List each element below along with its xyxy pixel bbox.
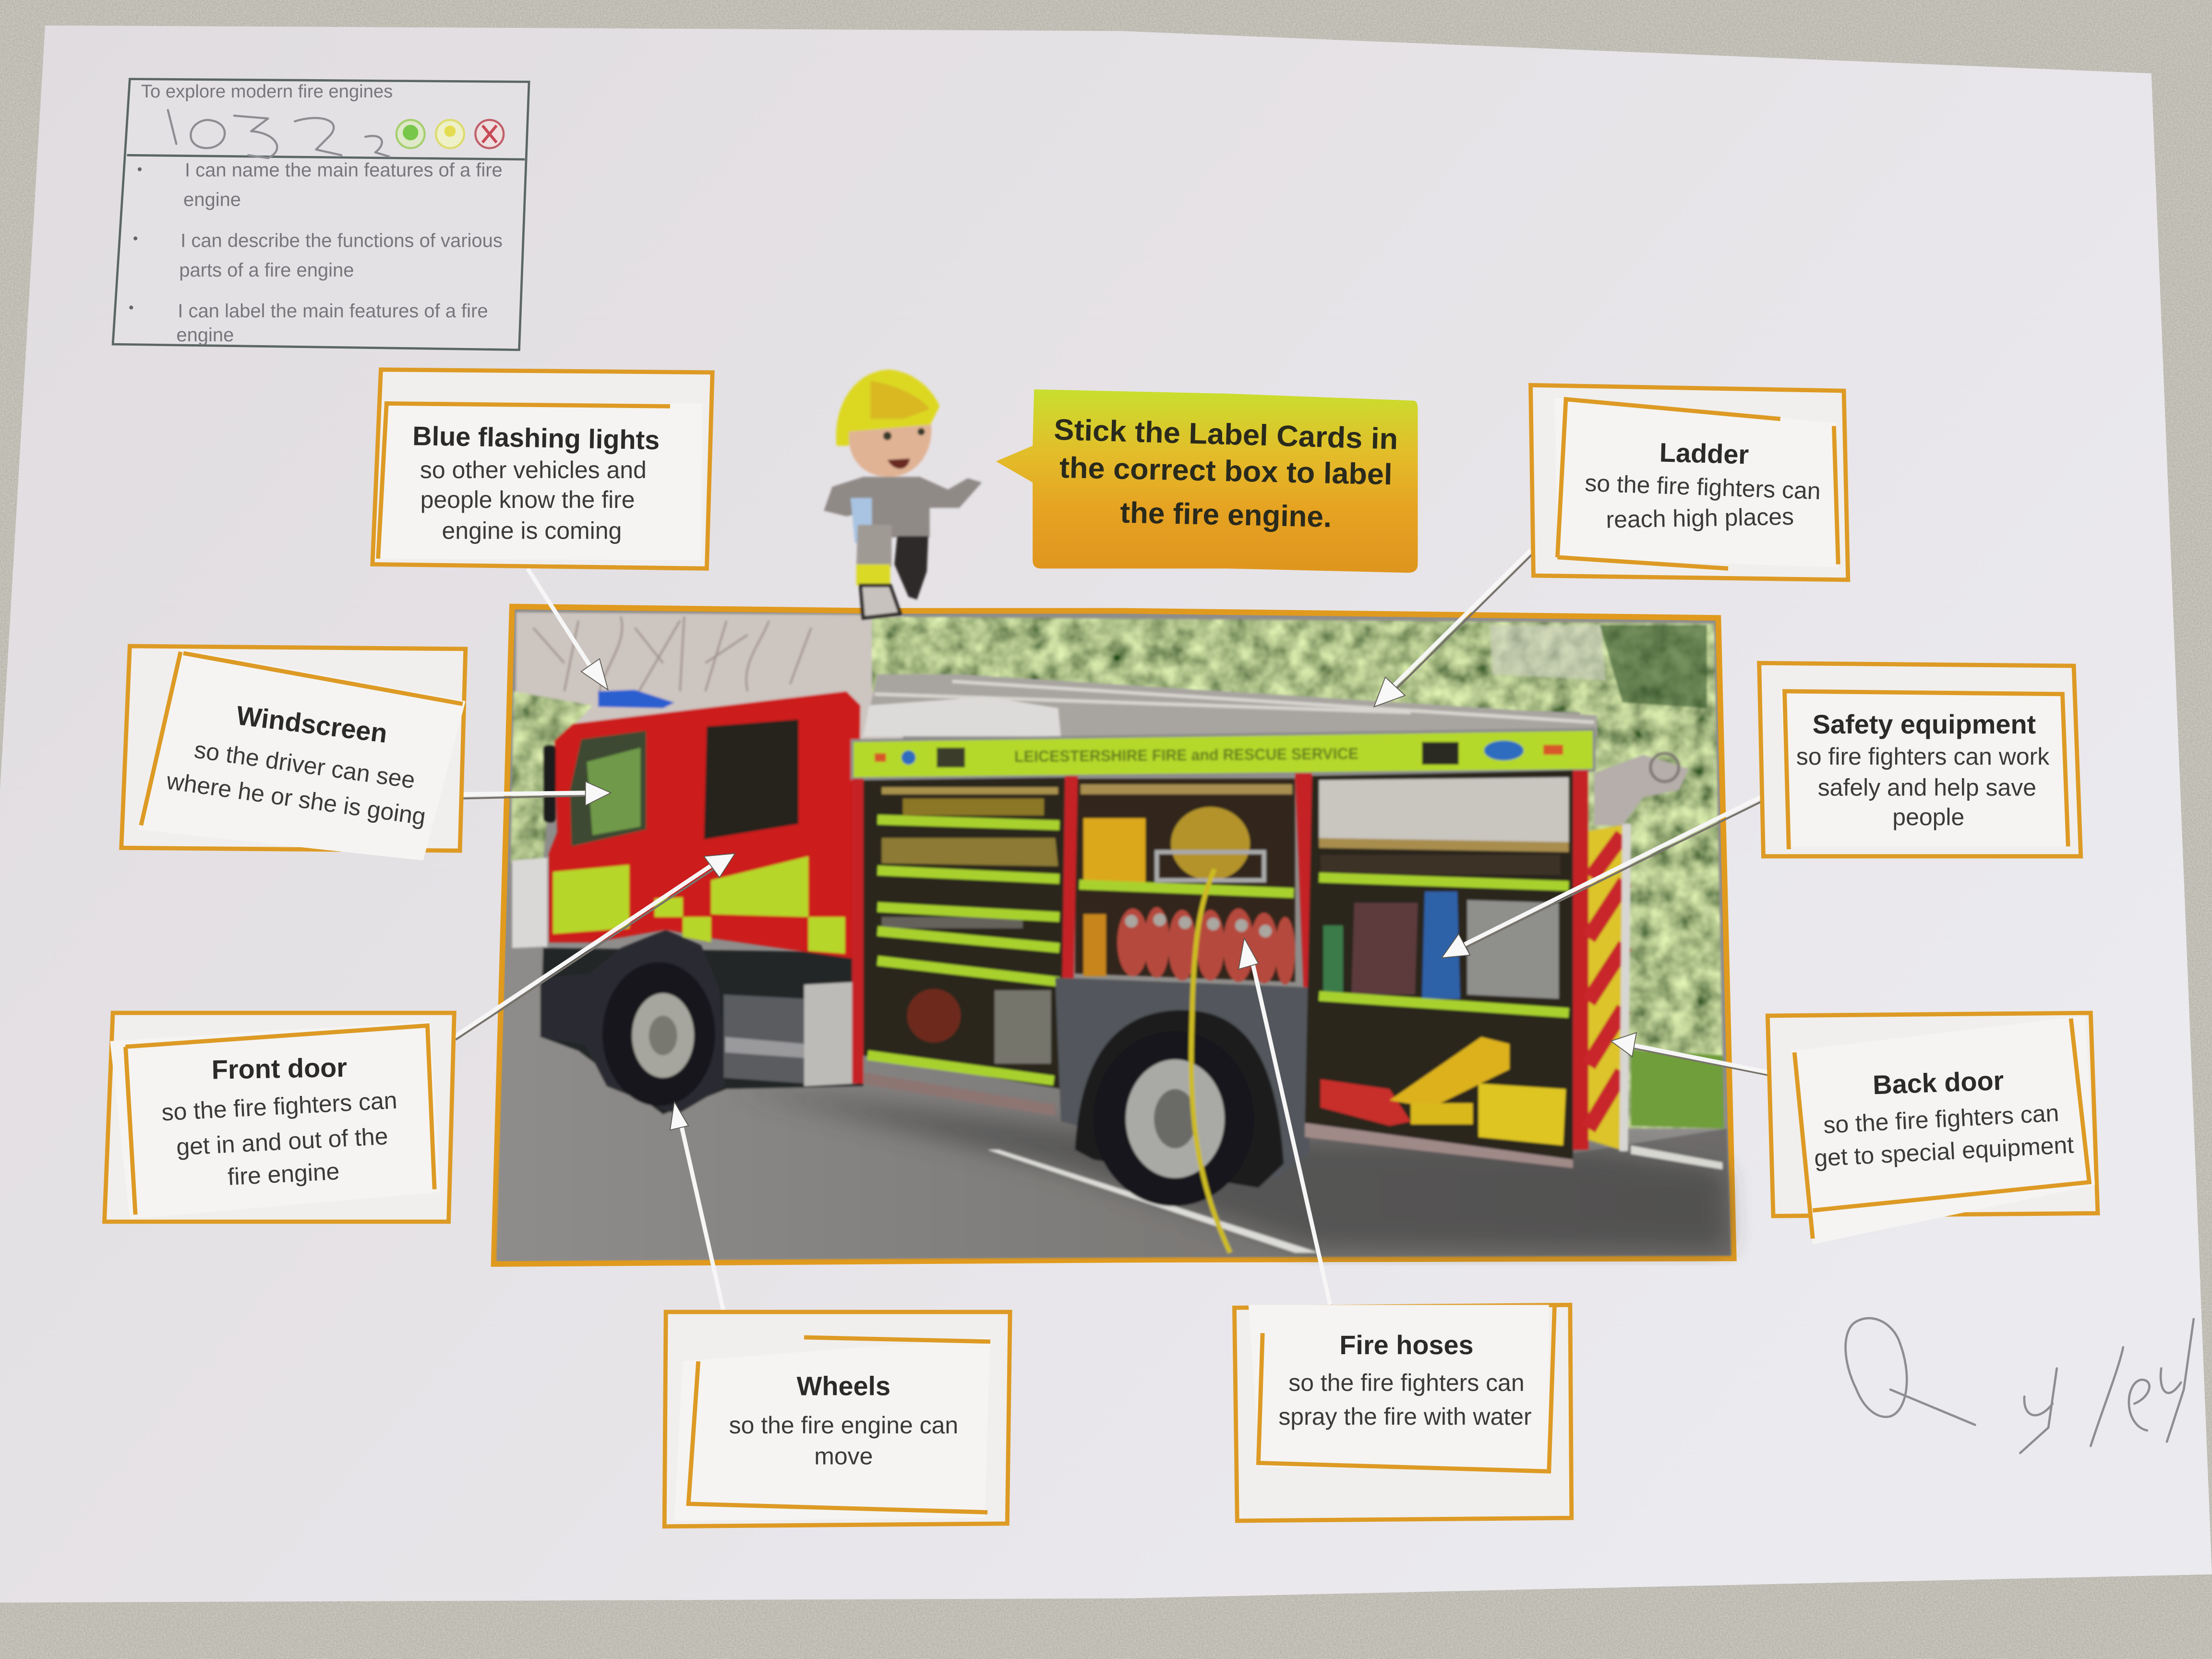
road xyxy=(496,948,1731,1260)
photo of fire engine xyxy=(494,607,1734,1264)
objective bullet list: engine xyxy=(183,189,241,210)
description xyxy=(420,457,647,544)
back leg xyxy=(894,536,928,600)
left locker xyxy=(861,777,1065,1116)
service name on bar: LEICESTERSHIRE FIRE and RESCUE SERVICE xyxy=(1014,745,1358,766)
grass verge xyxy=(1631,1049,1724,1129)
traffic light faces xyxy=(397,120,504,148)
card: fire hoses xyxy=(1234,1305,1572,1521)
description: fire engine xyxy=(227,1158,340,1190)
handwritten name xyxy=(1846,1318,2194,1453)
description xyxy=(729,1412,958,1469)
yellow hose xyxy=(1191,869,1230,1253)
red cab xyxy=(549,691,861,959)
bubble instructions: the fire engine. xyxy=(1120,496,1332,534)
objective bullet list xyxy=(129,159,503,346)
speech bubble xyxy=(996,389,1418,573)
title: Safety equipment xyxy=(1813,709,2036,739)
middle locker xyxy=(1075,779,1295,985)
arrow: wheels xyxy=(670,1102,725,1313)
bubble instructions: Stick the Label Cards in xyxy=(1053,413,1398,456)
description: people know the fire xyxy=(421,486,635,513)
rear body and rear arch xyxy=(1055,978,1312,1188)
card: windscreen xyxy=(121,646,466,861)
objective bullet list: I can describe the functions of various xyxy=(180,230,503,251)
description: so the fire fighters can xyxy=(1288,1370,1525,1396)
card: ladder xyxy=(1531,385,1848,580)
photo frame xyxy=(494,607,1734,1264)
parked white car xyxy=(512,858,547,948)
card: wheels xyxy=(664,1312,1010,1527)
arrow: front door xyxy=(454,854,735,1040)
description: so the fire engine can xyxy=(729,1412,958,1439)
description: reach high places xyxy=(1606,503,1794,533)
right locker xyxy=(1305,770,1573,1168)
arrow: fire hoses xyxy=(1238,938,1332,1306)
road white line xyxy=(987,1150,1319,1253)
bubble instructions: the correct box to label xyxy=(1059,451,1393,491)
objective bullet list: I can label the main features of a fire xyxy=(178,301,488,322)
objective bullet list: parts of a fire engine xyxy=(179,260,354,281)
description: so fire fighters can work xyxy=(1796,743,2050,770)
description: get to special equipment xyxy=(1814,1131,2075,1172)
description: spray the fire with water xyxy=(1278,1403,1532,1430)
description xyxy=(1585,469,1821,533)
arrow: windscreen xyxy=(463,781,611,805)
sky and bare trees xyxy=(515,612,903,790)
front leg xyxy=(856,525,891,567)
front lower body and arch xyxy=(541,930,858,1115)
firefighter character xyxy=(824,370,982,618)
title: Blue flashing lights xyxy=(412,421,660,455)
door window xyxy=(704,720,798,840)
description: people xyxy=(1892,804,1964,830)
description: get in and out of the xyxy=(176,1123,389,1161)
learning objective table xyxy=(113,79,529,350)
photo content xyxy=(496,612,1731,1260)
card: safety equipment xyxy=(1759,663,2081,856)
description xyxy=(1814,1099,2075,1172)
rear pump xyxy=(1594,753,1689,825)
title: Back door xyxy=(1872,1065,2004,1100)
description: so the fire fighters can xyxy=(1823,1099,2060,1139)
title: Ladder xyxy=(1659,437,1749,469)
card: blue flashing lights xyxy=(373,370,712,568)
description: move xyxy=(814,1443,873,1469)
title: Windscreen xyxy=(235,700,389,748)
objective bullet list: I can name the main features of a fire xyxy=(185,159,503,180)
foliage xyxy=(872,616,1724,1129)
title: Fire hoses xyxy=(1339,1330,1474,1360)
handwritten date xyxy=(168,110,389,158)
objective title: To explore modern fire engines xyxy=(141,81,393,102)
objective bullet list: engine xyxy=(176,325,234,346)
body green header bar xyxy=(852,729,1594,779)
arrow: blue lights xyxy=(528,568,608,690)
under cab dark chassis xyxy=(541,948,864,1115)
description: so the fire fighters can xyxy=(1585,469,1821,505)
body and arms xyxy=(824,477,982,538)
red pillars xyxy=(852,770,1588,1150)
front wheel xyxy=(602,962,715,1106)
arrow: back door xyxy=(1611,1033,1767,1075)
title: Front door xyxy=(211,1052,347,1085)
blue flashing light xyxy=(598,690,674,708)
description: engine is coming xyxy=(442,517,622,544)
card: front door xyxy=(104,1013,454,1222)
road shadow xyxy=(733,1086,1727,1249)
cab yellow checks xyxy=(553,856,845,954)
description xyxy=(1796,743,2050,830)
description: so the driver can see xyxy=(192,736,417,793)
ladder on roof xyxy=(864,674,1597,736)
description: where he or she is going xyxy=(165,767,427,830)
description xyxy=(1278,1370,1532,1430)
helmet xyxy=(836,370,939,446)
bubble instructions xyxy=(1053,413,1398,534)
description xyxy=(161,1087,398,1190)
windscreen xyxy=(570,731,646,846)
rear wheel xyxy=(1094,1031,1254,1206)
arrow: ladder xyxy=(1374,550,1532,707)
card: back door xyxy=(1767,1013,2098,1244)
arrow: safety equipment xyxy=(1442,797,1762,958)
rear door with chevrons xyxy=(1588,824,1631,1151)
description: so the fire fighters can xyxy=(161,1087,398,1126)
face xyxy=(849,425,931,477)
description xyxy=(165,736,427,830)
description: safely and help save xyxy=(1818,774,2036,801)
title: Wheels xyxy=(797,1370,890,1401)
description: so other vehicles and xyxy=(420,457,647,483)
mirror xyxy=(543,745,556,822)
